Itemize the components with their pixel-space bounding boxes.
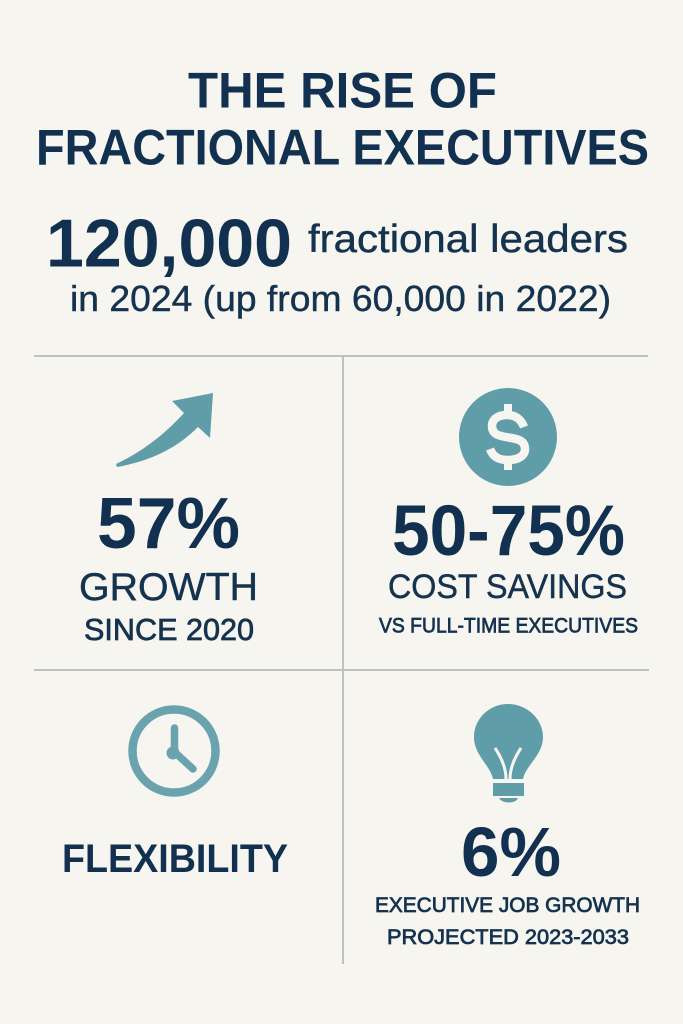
growth sublabel: SINCE 2020 (84, 612, 254, 647)
panel: cost savings (379, 388, 638, 638)
job growth period: PROJECTED 2023-2033 (387, 926, 629, 949)
icon: rising arrow (116, 393, 213, 467)
headline statistic (46, 206, 628, 319)
icon: clock (132, 710, 216, 792)
flexibility label: FLEXIBILITY (62, 837, 288, 881)
panel: job growth (375, 704, 640, 949)
title (36, 62, 649, 176)
growth figure: 57% (97, 484, 240, 564)
title: FRACTIONAL EXECUTIVES (36, 120, 649, 176)
headline statistic: in 2024 (up from 60,000 in 2022) (70, 278, 611, 319)
savings sublabel: VS FULL-TIME EXECUTIVES (379, 614, 638, 638)
savings label: COST SAVINGS (388, 568, 627, 606)
savings figure: 50-75% (392, 492, 625, 571)
icon: lightbulb (474, 704, 543, 802)
growth label: GROWTH (79, 566, 258, 609)
icon: dollar coin (459, 388, 557, 486)
panel: growth (79, 393, 258, 647)
job growth label: EXECUTIVE JOB GROWTH (375, 894, 640, 917)
headline statistic: 120,000 (46, 206, 292, 282)
panel: flexibility (62, 710, 288, 881)
title: THE RISE OF (188, 62, 497, 118)
job growth figure: 6% (461, 813, 561, 891)
headline statistic: fractional leaders (308, 218, 628, 261)
